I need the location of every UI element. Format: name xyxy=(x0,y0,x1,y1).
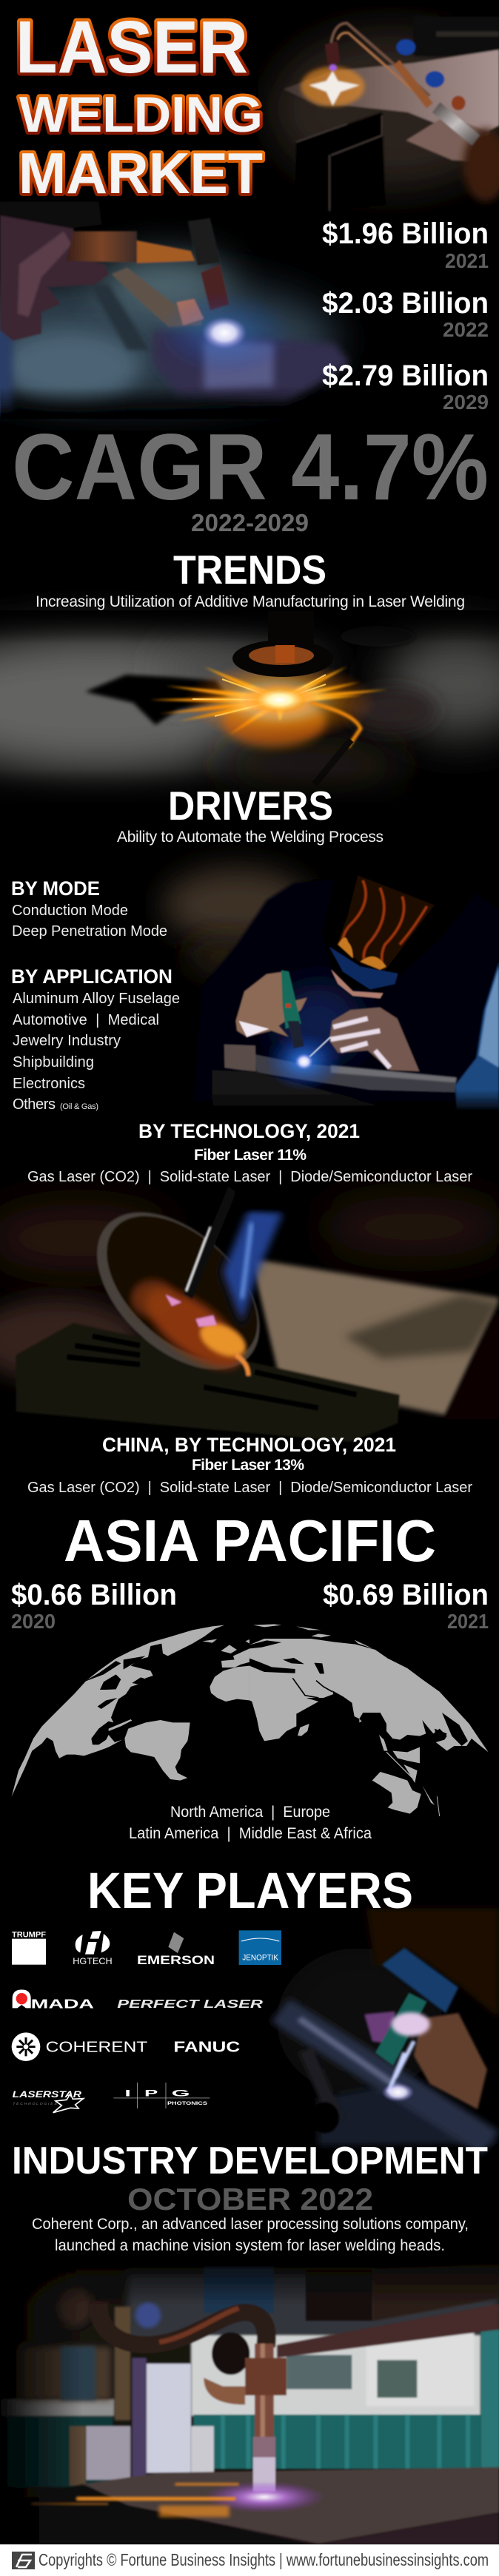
application item: aluminum: Aluminum Alloy Fuselage xyxy=(13,991,180,1007)
trends text: Increasing Utilization of Additive Manufacturing in Laser Welding xyxy=(36,593,465,610)
photo: torch welding pipe, key players background xyxy=(277,1908,499,2145)
logo: Amada: MADA xyxy=(31,1996,94,2011)
logo: LaserStar xyxy=(13,2089,84,2113)
logo: IPG Photonics: P xyxy=(144,2088,158,2098)
logo: Jenoptik xyxy=(239,1930,281,1965)
key players heading: KEY PLAYERS xyxy=(87,1862,413,1919)
photo: laser cutting head in workshop xyxy=(0,2251,499,2546)
development text line 2: launched a machine vision system for laser welding heads. xyxy=(55,2237,445,2254)
logo: Perfect Laser: PERFECT LASER xyxy=(117,1998,263,2011)
logo: Amada xyxy=(13,1989,94,2011)
by mode item 2: Deep Penetration Mode xyxy=(12,923,167,940)
footer logo xyxy=(12,2552,35,2569)
by mode heading: BY MODE xyxy=(11,877,100,900)
title line: LASER: LASER xyxy=(16,6,248,89)
market values xyxy=(322,218,489,414)
title line: WELDING: WELDING xyxy=(19,87,263,143)
application item: electronics: Electronics xyxy=(13,1076,85,1092)
technology list: Gas Laser (CO2) | Solid-state Laser | Diode/Semiconductor Laser xyxy=(27,1169,472,1185)
year 2020: 2020 xyxy=(11,1610,56,1633)
logo: Emerson: EMERSON xyxy=(137,1953,215,1967)
logo: HGTech: HGTECH xyxy=(73,1956,113,1966)
logo: Jenoptik: JENOPTIK xyxy=(242,1953,278,1962)
value 2021: $1.96 Billion xyxy=(322,218,489,250)
technology section xyxy=(27,1120,472,1185)
value 2029: $2.79 Billion xyxy=(322,360,489,392)
by application heading: BY APPLICATION xyxy=(11,965,173,988)
logo: Emerson xyxy=(137,1932,215,1967)
industry development heading: INDUSTRY DEVELOPMENT xyxy=(12,2140,488,2182)
photo: gas torch on metal plate xyxy=(271,16,499,212)
development text line 1: Coherent Corp., an advanced laser processing solutions company, xyxy=(32,2216,469,2233)
logo: HGTech xyxy=(73,1931,113,1966)
regions line 1: North America | Europe xyxy=(170,1804,330,1821)
photo: laser cutting sparks on stone xyxy=(0,610,499,825)
technology share: Fiber Laser 11% xyxy=(194,1147,307,1164)
year 2022: 2022 xyxy=(443,318,489,341)
drivers section xyxy=(117,783,384,846)
china share: Fiber Laser 13% xyxy=(192,1457,304,1474)
logo: Coherent xyxy=(12,2032,148,2061)
CAGR period: 2022-2029 xyxy=(191,509,309,536)
application item: jewelry: Jewelry Industry xyxy=(13,1033,121,1049)
logo: IPG Photonics: I xyxy=(124,2088,131,2098)
logo: Trumpf xyxy=(12,1930,46,1965)
logo: IPG Photonics: PHOTONICS xyxy=(167,2102,207,2106)
industry development section xyxy=(12,2140,488,2254)
application item: shipbuilding: Shipbuilding xyxy=(13,1054,94,1070)
logo row container xyxy=(12,1930,281,2113)
value 2022: $2.03 Billion xyxy=(322,287,489,320)
trends heading: TRENDS xyxy=(173,547,326,593)
application note: (Oil & Gas) xyxy=(60,1102,98,1111)
logo: LaserStar: LASERSTAR xyxy=(13,2089,81,2100)
world map globe xyxy=(12,1624,489,1816)
year 2021: 2021 xyxy=(447,1610,489,1633)
by mode items: Conduction Mode xyxy=(12,903,128,919)
year 2021: 2021 xyxy=(445,249,489,272)
logo: IPG Photonics: G xyxy=(172,2088,190,2098)
application item: automotive, medical: Automotive | Medical xyxy=(13,1012,159,1028)
development date: OCTOBER 2022 xyxy=(127,2182,373,2216)
application item: others: Others xyxy=(13,1096,56,1113)
footer xyxy=(0,2544,499,2576)
technology heading: BY TECHNOLOGY, 2021 xyxy=(138,1120,360,1142)
key players xyxy=(12,1862,413,2113)
logo: Fanuc: FANUC xyxy=(173,2039,240,2056)
photo: hand with welding torch xyxy=(0,201,382,419)
segmentation lists xyxy=(11,877,180,1113)
logo: IPG Photonics xyxy=(113,2083,210,2108)
region heading: ASIA PACIFIC xyxy=(64,1508,436,1574)
value 2021: $0.69 Billion xyxy=(323,1579,489,1611)
drivers text: Ability to Automate the Welding Process xyxy=(117,829,384,846)
drivers heading: DRIVERS xyxy=(168,783,333,829)
photo: welder with flame helmet xyxy=(163,856,499,1112)
logo: Trumpf: TRUMPF xyxy=(12,1930,46,1939)
logo: LaserStar: TECHNOLOGIES xyxy=(13,2102,57,2106)
other regions list xyxy=(129,1804,372,1842)
photo: ladle and blue flame xyxy=(0,1147,499,1503)
trends section xyxy=(36,547,465,610)
asia pacific section xyxy=(11,1508,489,1633)
logo: Coherent: COHERENT xyxy=(46,2039,148,2056)
year 2029: 2029 xyxy=(443,391,489,414)
regions line 2: Latin America | Middle East & Africa xyxy=(129,1825,372,1842)
china technology section xyxy=(27,1434,472,1496)
title xyxy=(16,6,263,206)
china list: Gas Laser (CO2) | Solid-state Laser | Diode/Semiconductor Laser xyxy=(27,1480,472,1496)
value 2020: $0.66 Billion xyxy=(11,1579,177,1611)
china heading: CHINA, BY TECHNOLOGY, 2021 xyxy=(102,1434,396,1456)
title line: MARKET: MARKET xyxy=(19,141,263,206)
